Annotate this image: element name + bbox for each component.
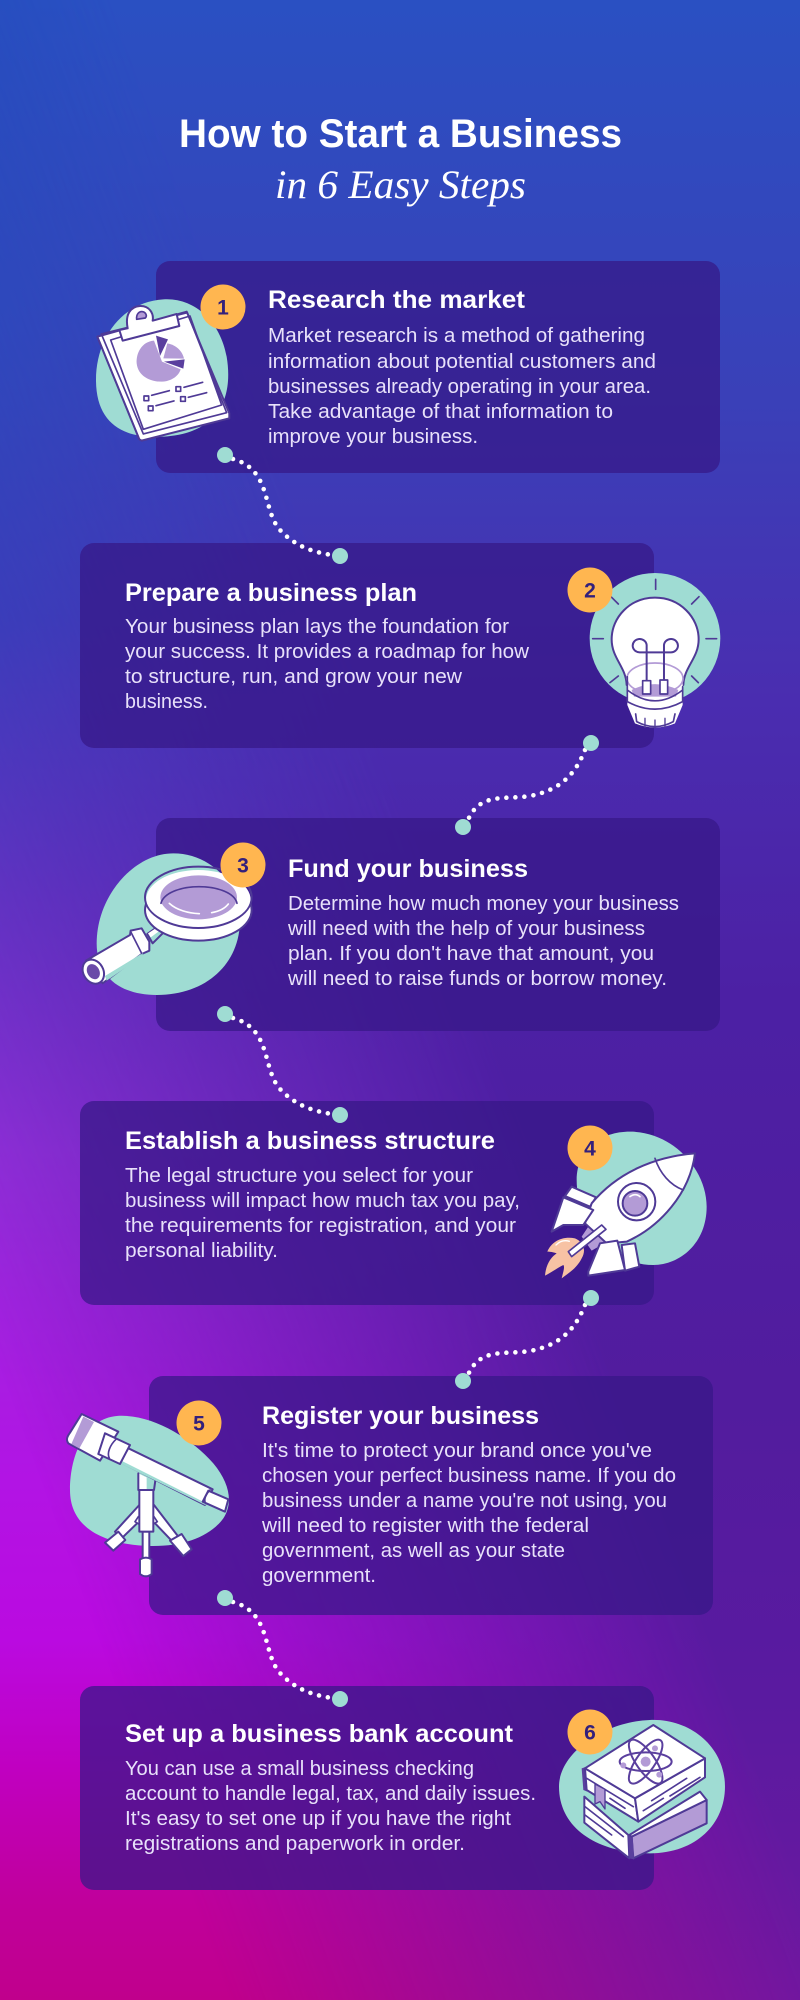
panel: step 6 set up a business bank account (80, 1686, 654, 1890)
text block: step 5: government. (262, 1565, 376, 1587)
text block: step 5: business under a name you're not using, you (262, 1490, 667, 1512)
panel: step 4 establish a business structure (80, 1101, 654, 1305)
badge: number 6 (568, 1710, 612, 1754)
heading: step 6: Set up a business bank account (125, 1720, 514, 1748)
text block: step 6: You can use a small business checking (125, 1758, 474, 1780)
badge: number 5 (176, 1400, 222, 1446)
text block: step 5: chosen your perfect business name. If you do (262, 1465, 676, 1487)
text block: step 4: The legal structure you select for your (125, 1165, 473, 1187)
text block: step 4: business will impact how much tax you pay, (125, 1190, 520, 1212)
heading: step 5: Register your business (262, 1402, 539, 1430)
badge: number 4: 4 (584, 1138, 596, 1160)
text block: step 1: improve your business. (268, 426, 478, 448)
icon: magnifying glass (78, 853, 252, 995)
text block: step 2: to structure, run, and grow your new (125, 666, 463, 688)
text block: step 3: plan. If you don't have that amount, you (288, 943, 654, 965)
text block: step 6: registrations and paperwork in order. (125, 1833, 465, 1855)
text block: step 3: Determine how much money your business (288, 893, 679, 915)
text block: step 1: Take advantage of that information to (268, 401, 613, 423)
text block: step 1 (268, 325, 656, 448)
panel: step 2 prepare a business plan (80, 543, 654, 748)
badge: number 6: 6 (584, 1722, 596, 1744)
heading: step 2: Prepare a business plan (125, 579, 417, 607)
arrow: dotted connector 1 to 2 (217, 447, 348, 564)
text block: step 5: government, as well as your state (262, 1540, 565, 1562)
text block: step 1: information about potential customers and (268, 351, 656, 373)
badge: number 2: 2 (584, 580, 596, 602)
text block: step 2: business. (125, 691, 208, 713)
text block: step 4: personal liability. (125, 1240, 278, 1262)
arrow: dotted connector 4 to 5 (455, 1290, 599, 1389)
text block: step 4 (125, 1165, 520, 1262)
badge: number 4 (568, 1126, 612, 1170)
text block: step 5: It's time to protect your brand once you've (262, 1440, 652, 1462)
icon: light bulb (590, 573, 720, 728)
icon: stacked books (559, 1720, 725, 1859)
icon: telescope (67, 1414, 229, 1576)
text block: step 2: your success. It provides a roadmap for how (125, 641, 530, 663)
badge: number 2 (568, 568, 612, 612)
heading: step 4: Establish a business structure (125, 1127, 495, 1155)
panel: step 3 fund your business (156, 818, 720, 1031)
text block: step 3: will need with the help of your business (287, 918, 645, 940)
text block: step 5 (261, 1440, 676, 1587)
arrow: dotted connector 5 to 6 (217, 1590, 348, 1707)
badge: number 3: 3 (237, 854, 249, 878)
badge: number 3 (220, 842, 266, 888)
panel: step 5 register your business (149, 1376, 713, 1615)
title: How to Start a Business (179, 112, 622, 156)
text block: step 1: businesses already operating in your area. (268, 376, 651, 398)
text block: step 3: will need to raise funds or borrow money. (287, 968, 667, 990)
arrow: dotted connector 2 to 3 (455, 735, 599, 835)
icon: rocket (545, 1132, 707, 1278)
text block: step 1: Market research is a method of gathering (268, 325, 645, 347)
badge: number 5: 5 (193, 1412, 205, 1436)
text block: step 6: account to handle legal, tax, and daily issues. (125, 1783, 536, 1805)
title (179, 112, 622, 207)
text block: step 2 (125, 616, 530, 713)
badge: number 1: 1 (217, 296, 229, 320)
heading: step 1: Research the market (268, 286, 526, 314)
heading: step 3: Fund your business (288, 855, 528, 883)
text block: step 4: the requirements for registration, and your (125, 1215, 516, 1237)
text block: step 6: It's easy to set one up if you have the right (125, 1808, 511, 1830)
text block: step 6 (125, 1758, 536, 1855)
badge: number 1 (200, 284, 246, 330)
text block: step 2: Your business plan lays the foundation for (125, 616, 509, 638)
panel: step 1 research the market (156, 261, 720, 473)
icon: clipboard with pie chart (96, 299, 229, 441)
text block: step 5: will need to register with the federal (261, 1515, 589, 1537)
text block: step 3 (287, 893, 679, 990)
title: in 6 Easy Steps (275, 162, 526, 207)
arrow: dotted connector 3 to 4 (217, 1006, 348, 1123)
